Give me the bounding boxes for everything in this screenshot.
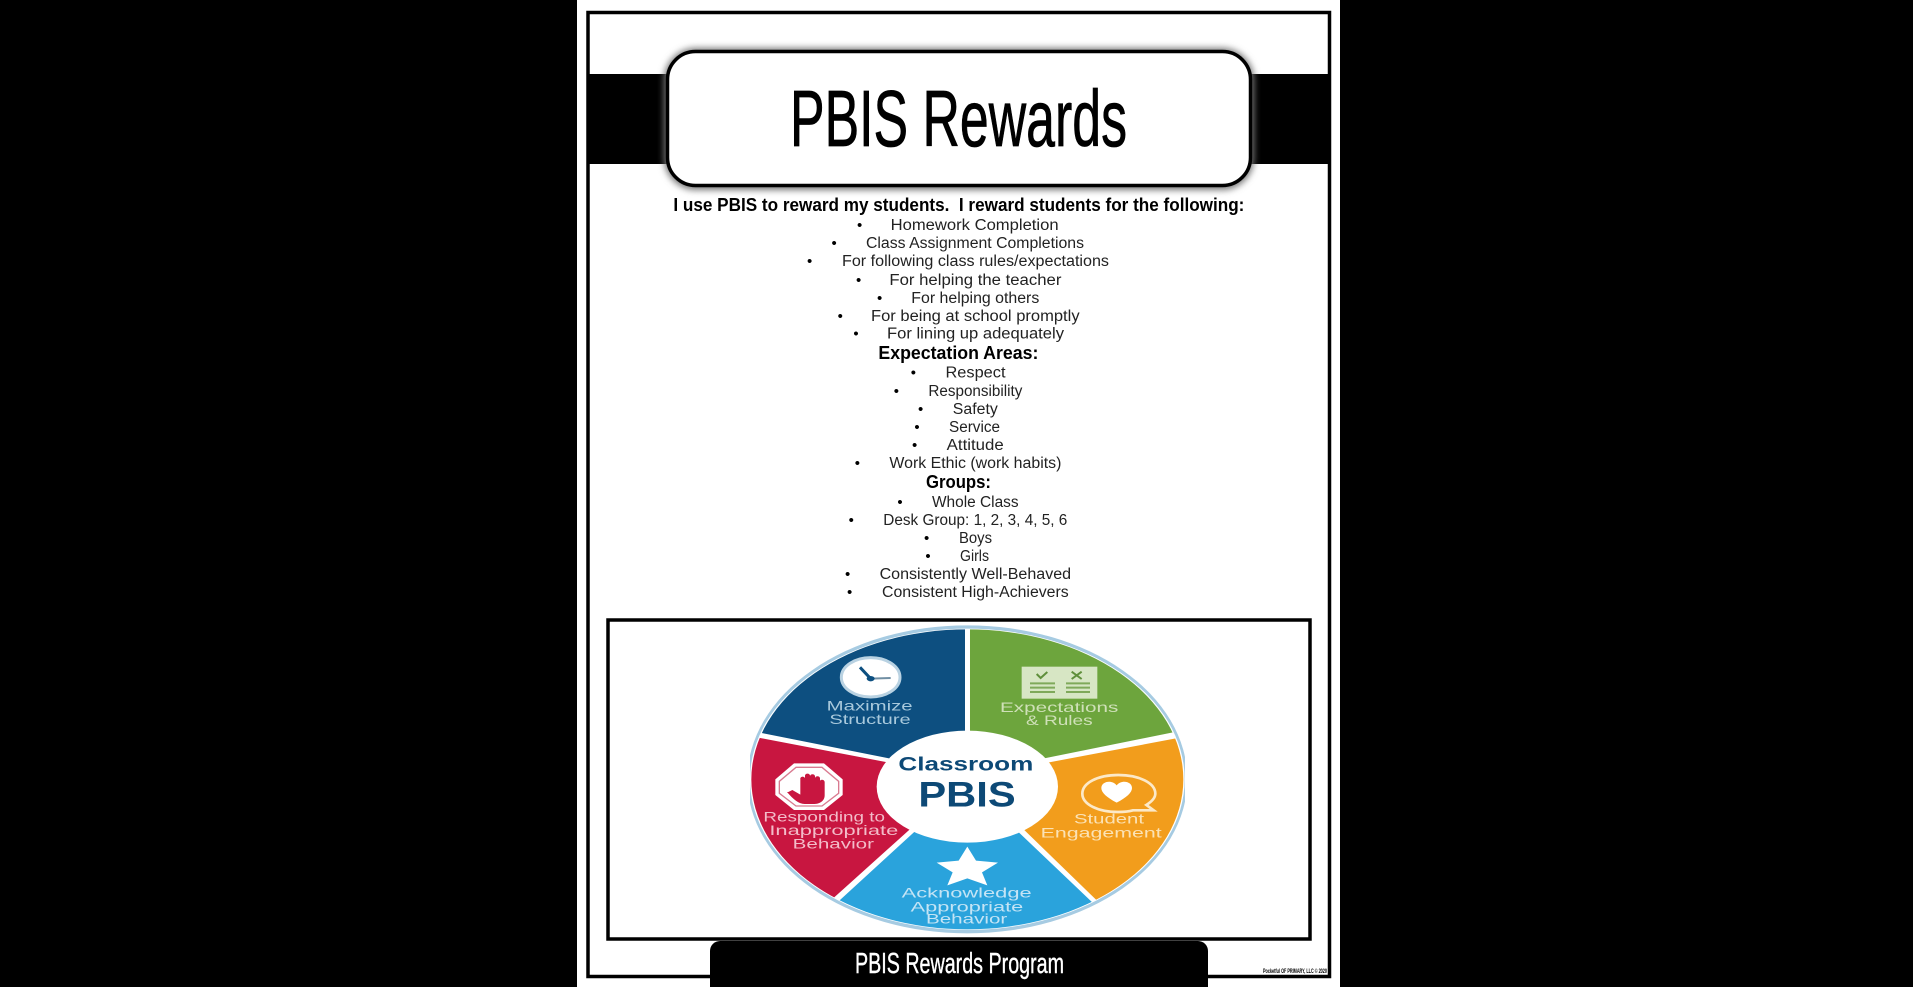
groups list: • [924,530,929,547]
expectation areas list: • [894,383,899,400]
centre label: Classroom [898,755,1033,776]
groups list: Consistent High-Achievers [882,584,1069,601]
reward list: Class Assignment Completions [866,235,1084,252]
expectation areas list: • [914,419,920,436]
page frame [588,12,1330,976]
segment: acknowledge appropriate behavior [840,832,1092,930]
expectation areas list: Respect [946,364,1006,382]
white page [577,0,1340,987]
expectation areas list: • [918,401,923,418]
groups list: Consistently Well-Behaved [880,566,1071,583]
label: responding to inappropriate behavior: Inappropriate [769,822,899,838]
wheel rim [747,625,1187,933]
expectation areas heading: Expectation Areas: [878,343,1038,363]
icon: star [937,847,998,885]
label: student engagement [1041,810,1162,840]
tab shape [710,941,1208,987]
segment: expectations and rules [970,629,1172,758]
label: maximize structure: Maximize [827,698,913,714]
groups list: • [897,494,903,511]
expectation areas list: Safety [953,401,998,418]
wheel base [750,629,1185,930]
reward list: • [807,253,812,270]
label: acknowledge appropriate behavior [902,884,1032,926]
label: acknowledge appropriate behavior: Appropriate [911,899,1024,915]
label: expectations and rules [1000,699,1118,728]
centre label: PBIS [918,776,1016,815]
groups list: • [849,512,854,529]
label: responding to inappropriate behavior [763,809,899,851]
label: acknowledge appropriate behavior: Acknowledge [902,884,1032,900]
groups list: • [845,566,850,583]
label: responding to inappropriate behavior: Behavior [793,835,874,851]
segment: maximize structure [762,629,965,758]
wheel disc [750,625,1185,934]
groups list: Boys [959,530,992,547]
groups list: Desk Group: 1, 2, 3, 4, 5, 6 [883,512,1067,529]
reward list: For helping others [911,290,1040,307]
expectation areas list: Work Ethic (work habits) [889,455,1061,472]
label: expectations and rules: & Rules [1026,712,1093,728]
title: PBIS Rewards [790,74,1127,163]
expectation areas list: • [911,364,916,382]
label: responding to inappropriate behavior: Responding to [763,809,885,825]
footer tab [710,941,1208,987]
groups list: Whole Class [932,494,1019,511]
expectation areas list [855,364,1061,472]
wheel segments [751,629,1184,930]
label: maximize structure [827,698,913,727]
intro heading: I use PBIS to reward my students. I reward students for the following: [673,195,1244,215]
reward list: For helping the teacher [889,272,1061,289]
poster [577,0,1340,987]
groups list: • [925,548,931,565]
reward list: • [877,290,882,307]
copyright: Pocketful OF PRIMARY, LLC © 2020 [1263,968,1327,975]
black band [589,74,1329,164]
reward list: • [832,235,837,252]
label: student engagement: Student [1074,810,1144,826]
image frame [608,620,1310,939]
icon: clock [841,658,900,697]
centre label [898,755,1033,815]
icon: speech bubble heart [1082,775,1155,812]
reward list: • [856,272,861,289]
groups list [845,494,1071,601]
classroom PBIS wheel [750,625,1185,934]
expectation areas list: • [855,455,860,472]
groups list: Girls [960,548,989,565]
reward list: For following class rules/expectations [842,253,1109,270]
reward list: Homework Completion [891,217,1059,234]
segment: responding to inappropriate behavior [751,738,910,898]
footer title: PBIS Rewards Program [855,948,1064,980]
label: maximize structure: Structure [829,711,911,727]
reward list [807,217,1109,342]
reward list: • [838,308,843,325]
expectation areas list: • [912,437,917,454]
groups list: • [847,584,852,601]
reward list: • [857,217,862,234]
segment: student engagement [1024,738,1184,900]
expectation areas list: Responsibility [928,383,1023,400]
title box shadow [664,48,1254,190]
reward list: For lining up adequately [887,326,1064,342]
expectation areas list: Attitude [947,437,1004,454]
label: student engagement: Engagement [1041,824,1162,840]
icon: checklist [1022,667,1097,699]
reward list: • [853,326,859,342]
title box [668,52,1250,186]
groups heading: Groups: [926,472,991,492]
wheel centre [877,731,1058,843]
label: expectations and rules: Expectations [1000,699,1118,715]
reward list: For being at school promptly [871,308,1080,325]
expectation areas list: Service [949,419,1000,436]
icon: stop hand [775,763,843,810]
title banner [589,48,1329,190]
label: acknowledge appropriate behavior: Behavior [926,910,1008,926]
